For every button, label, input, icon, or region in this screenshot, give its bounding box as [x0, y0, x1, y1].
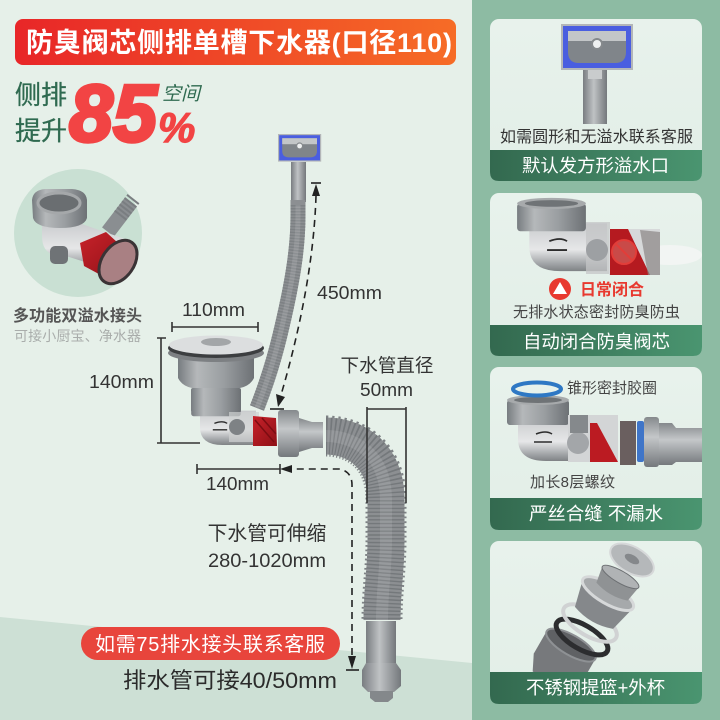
callout: multi-function dual overflow connector: 多功能双溢水接头 — [13, 306, 142, 325]
dimension: drain pipe diameter — [341, 355, 433, 503]
big corrugated drain hose — [326, 436, 386, 620]
callout: multi-function dual overflow connector: 可接小厨宝、净水器 — [14, 328, 141, 344]
text: telescopic range: 280-1020mm — [208, 551, 326, 572]
overflow tube — [291, 162, 306, 202]
panel: threaded seal — [490, 367, 702, 530]
footer label: 不锈钢提篮+外杯 — [526, 677, 665, 698]
dimension: 140mm horizontal: 140mm — [206, 474, 269, 494]
footer label — [490, 672, 702, 704]
footer label — [490, 325, 702, 356]
callout: 75 drain fitting pill — [81, 627, 340, 660]
callout: multi-function dual overflow connector — [13, 169, 145, 344]
right column background — [472, 0, 720, 720]
icon: overflow plate and pipe — [561, 24, 633, 124]
panel: stainless basket and cup — [490, 537, 702, 704]
headline: side drain gains 85% space — [15, 69, 203, 159]
footer label — [490, 498, 702, 530]
text: drain connects 40/50mm: 排水管可接40/50mm — [123, 668, 337, 693]
icon: closed valve illustration — [517, 198, 702, 275]
icon: sealed valve illustration — [507, 382, 702, 467]
knob and red valve flap — [229, 412, 277, 446]
text: telescopic range: 下水管可伸缩 — [208, 523, 326, 545]
headline: side drain gains 85% space: 侧排 — [15, 80, 67, 110]
elbow valve body — [191, 392, 256, 445]
callout: 75 drain fitting pill: 如需75排水接头联系客服 — [95, 633, 325, 656]
corrugated overflow hose — [257, 200, 298, 408]
dimension: 450mm hose arrow: 450mm — [317, 283, 382, 303]
strainer lid and cup — [168, 336, 264, 412]
panel: square overflow — [490, 19, 702, 181]
title banner: 防臭阀芯侧排单槽下水器(口径110) — [26, 28, 452, 58]
text: telescopic range — [208, 523, 326, 572]
badge: normally closed — [549, 278, 644, 300]
panel: auto-closing valve: 无排水状态密封防臭防虫 — [513, 304, 680, 321]
footer label: 默认发方形溢水口 — [522, 155, 669, 176]
panel: threaded seal: 锥形密封胶圈 — [567, 380, 657, 397]
icon: square overflow plate — [278, 134, 321, 162]
badge: normally closed: 日常闭合 — [580, 280, 644, 299]
headline: side drain gains 85% space: 空间 — [162, 83, 203, 105]
title banner — [15, 19, 456, 65]
footer label: 严丝合缝 不漏水 — [529, 503, 663, 524]
product: overflow plate and hose — [257, 134, 321, 408]
panel: auto-closing valve — [490, 193, 702, 356]
icon: connector with hose — [32, 189, 145, 291]
panel: threaded seal: 加长8层螺纹 — [530, 474, 615, 491]
dimension: drain pipe diameter: 下水管直径 — [341, 355, 433, 376]
dimension: 140mm horizontal — [197, 464, 280, 494]
union nut and short pipe — [278, 410, 323, 457]
dimension: telescopic length arrow — [280, 465, 359, 670]
dimension: 110mm width: 110mm — [182, 300, 245, 320]
panel: square overflow: 如需圆形和无溢水联系客服 — [500, 128, 693, 146]
headline: side drain gains 85% space: % — [158, 104, 195, 151]
headline: side drain gains 85% space: 提升 — [15, 116, 67, 146]
headline: side drain gains 85% space: 85 — [69, 69, 158, 159]
footer label: 自动闭合防臭阀芯 — [523, 331, 670, 352]
footer label — [490, 150, 702, 181]
product: sink strainer, valve and outlet — [168, 336, 401, 702]
outlet connector — [362, 621, 401, 702]
icon: exploded strainer parts — [526, 537, 659, 695]
dimension: 140mm height — [89, 338, 200, 443]
dimension: 110mm width — [172, 300, 258, 332]
dimension: drain pipe diameter: 50mm — [360, 380, 413, 400]
floor band — [0, 617, 472, 720]
dimension: 450mm hose arrow — [270, 183, 382, 409]
dimension: 140mm height: 140mm — [89, 372, 154, 392]
